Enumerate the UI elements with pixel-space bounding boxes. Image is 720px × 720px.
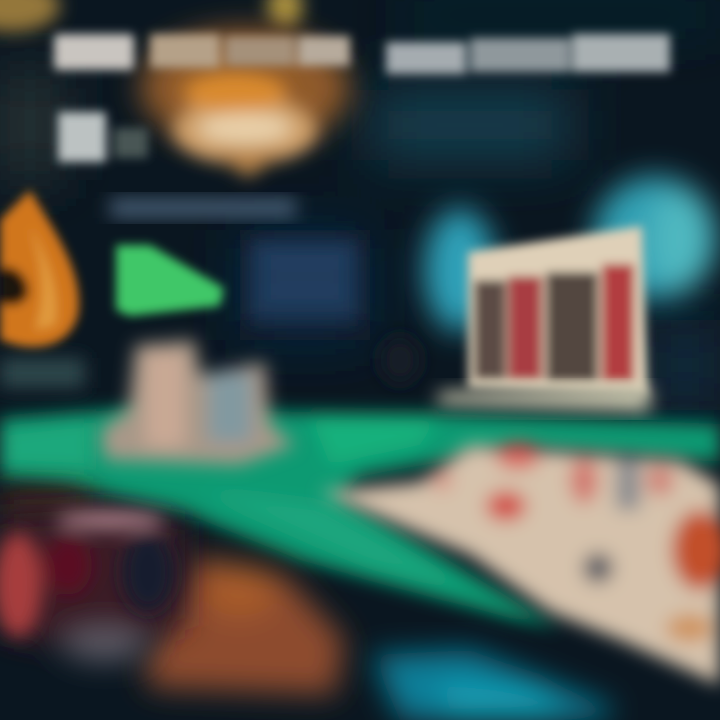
title right block (386, 34, 670, 74)
title left block (54, 34, 350, 70)
green table (0, 408, 720, 628)
poker chips (0, 508, 185, 661)
bar: red (508, 276, 542, 380)
icon: corner ornament (0, 0, 303, 32)
card face: orange (672, 510, 720, 590)
card pips: red (496, 443, 540, 469)
teal circles (424, 176, 717, 332)
panel base (436, 386, 650, 412)
playing cards (320, 443, 720, 685)
small dark figures (0, 336, 420, 388)
title second line block (58, 112, 148, 162)
chip stacks (100, 340, 295, 465)
card pip: grey (616, 458, 640, 510)
subtitle block (110, 198, 296, 218)
blue text panel (250, 240, 358, 320)
bar: red right (602, 264, 634, 382)
background glow (0, 0, 720, 410)
bar: dark (546, 272, 598, 382)
chart panel (468, 226, 648, 396)
icon: orange flame (0, 190, 79, 347)
cyan floor glow (372, 650, 615, 720)
icon: green arrow (116, 245, 224, 316)
poker chip colours (0, 511, 174, 637)
bar: brown (474, 280, 506, 380)
icon: chandelier glow (173, 72, 317, 178)
icon: gold chandelier (140, 28, 350, 148)
wood table edge (0, 490, 345, 695)
